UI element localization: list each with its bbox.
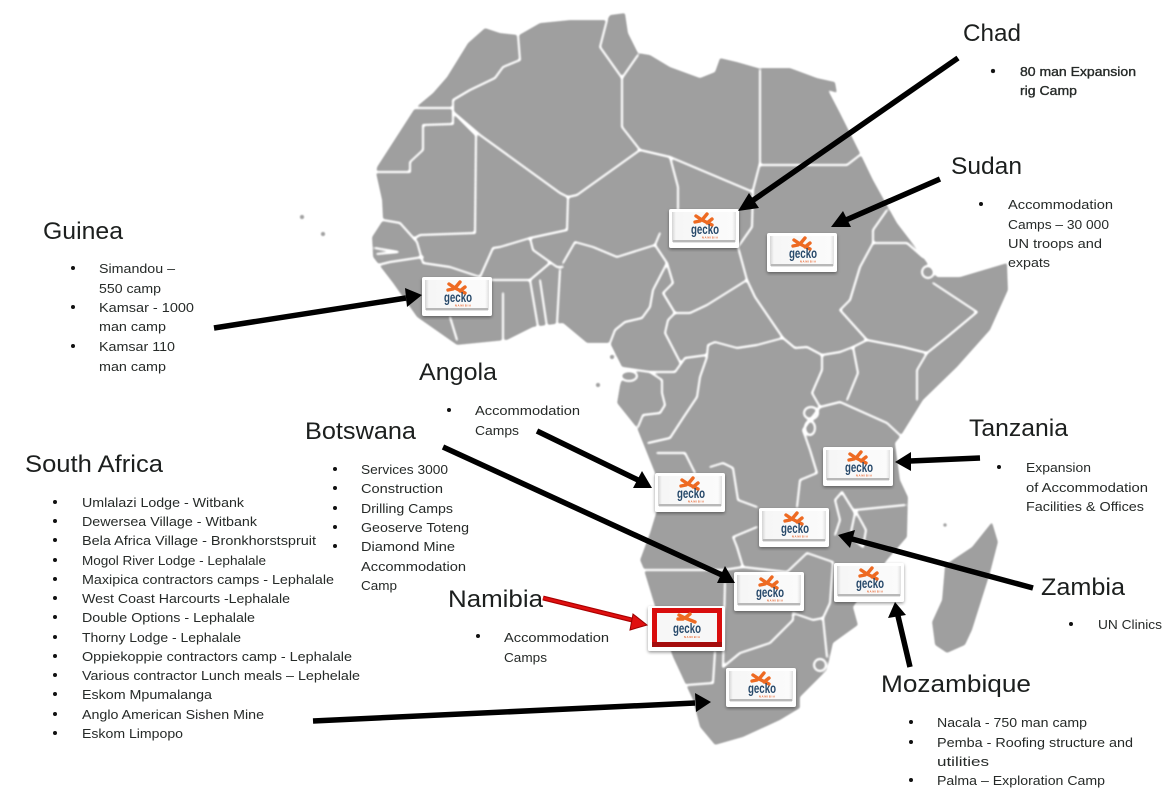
list: Guinea: Simandou – xyxy=(99,261,176,276)
label: Tanzania xyxy=(969,415,1148,514)
heading: Mozambique: Mozambique xyxy=(881,671,1031,698)
logo card: Chad xyxy=(669,209,739,248)
list: Sudan: expats xyxy=(1008,255,1050,270)
list: Zambia: UN Clinics xyxy=(1098,617,1162,632)
logo card: Namibia highlighted: gecko xyxy=(673,620,701,636)
arrow: Botswana xyxy=(443,447,735,583)
heading: Sudan: Sudan xyxy=(951,153,1022,180)
logo card: Angola: NAMIBIA xyxy=(688,500,704,504)
list: Botswana: Drilling Camps xyxy=(361,501,453,516)
logo card: Guinea: gecko xyxy=(444,289,472,305)
list: Mozambique xyxy=(909,715,1133,788)
list: South Africa xyxy=(53,495,360,741)
list: South Africa: Dewersea Village - Witbank xyxy=(82,514,257,529)
list: Botswana: Geoserve Toteng xyxy=(361,520,469,535)
list: Tanzania: Facilities & Offices xyxy=(1026,499,1144,514)
heading: Chad: Chad xyxy=(963,20,1021,47)
arrow: Mozambique xyxy=(888,602,910,667)
label: Zambia xyxy=(1041,574,1162,632)
list: South Africa: Various contractor Lunch meals – Lephelale xyxy=(82,668,360,683)
logo card: Zambia: gecko xyxy=(781,520,809,536)
logo card: Angola: gecko xyxy=(677,485,705,501)
list: Sudan xyxy=(979,197,1113,270)
country borders xyxy=(375,20,977,685)
logo card: Guinea xyxy=(422,277,492,316)
logo card: Sudan: NAMIBIA xyxy=(800,260,816,264)
Madagascar xyxy=(932,522,998,653)
list: Mozambique: Nacala - 750 man camp xyxy=(937,715,1087,730)
arrow: Chad xyxy=(738,58,958,211)
logo card: Zambia xyxy=(759,508,829,547)
list: South Africa: Oppiekoppie contractors camp - Lephalale xyxy=(82,649,352,664)
label: Mozambique xyxy=(881,671,1133,788)
logo card: Mozambique xyxy=(834,563,904,602)
logo card: Tanzania: NAMIBIA xyxy=(856,474,872,478)
label: Namibia xyxy=(448,586,609,665)
list: Botswana: Accommodation xyxy=(361,559,466,574)
arrow: South Africa xyxy=(313,693,711,721)
heading: Guinea: Guinea xyxy=(43,218,123,245)
list: Guinea: Kamsar 110 xyxy=(99,339,175,354)
logo card: Namibia highlighted xyxy=(648,606,725,651)
list: Sudan: Accommodation xyxy=(1008,197,1113,212)
arrow: Angola xyxy=(537,431,652,488)
list: Mozambique: utilities xyxy=(937,754,990,769)
logo card: Sudan xyxy=(767,233,837,272)
list: Guinea: Kamsar - 1000 xyxy=(99,300,194,315)
list: Botswana: Services 3000 xyxy=(361,462,448,477)
list: Chad xyxy=(991,64,1136,98)
list: Chad: 80 man Expansion xyxy=(1020,64,1136,79)
label: Sudan xyxy=(951,153,1113,270)
list: Botswana: Construction xyxy=(361,481,443,496)
list: South Africa: Maxipica contractors camps - Lephalale xyxy=(82,572,334,587)
label: South Africa xyxy=(25,451,360,741)
label: Angola xyxy=(419,359,580,438)
arrow: Zambia xyxy=(838,530,1033,588)
map of Africa xyxy=(280,0,1020,760)
logo card: Tanzania: gecko xyxy=(845,459,873,475)
list: Namibia xyxy=(476,630,609,665)
list: South Africa: West Coast Harcourts -Lephalale xyxy=(82,591,290,606)
list: Chad: rig Camp xyxy=(1020,83,1077,98)
logo card: Chad: gecko xyxy=(691,221,719,237)
list: Namibia: Camps xyxy=(504,650,547,665)
list: South Africa: Bela Africa Village - Bronkhorstspruit xyxy=(82,533,316,548)
heading: Angola: Angola xyxy=(419,359,497,386)
list: South Africa: Mogol River Lodge - Lephalale xyxy=(82,553,266,568)
list: Mozambique: Palma – Exploration Camp xyxy=(937,773,1105,788)
list: Sudan: Camps – 30 000 xyxy=(1008,217,1109,232)
logo card: Zambia: NAMIBIA xyxy=(792,534,808,538)
list: Guinea: 550 camp xyxy=(99,281,161,296)
list: Guinea: man camp xyxy=(99,359,166,374)
list: Tanzania xyxy=(997,460,1148,514)
label: Chad xyxy=(963,20,1136,98)
arrow: Namibia xyxy=(543,598,647,630)
list: Guinea xyxy=(71,261,194,374)
list: South Africa: Umlalazi Lodge - Witbank xyxy=(82,495,244,510)
heading: Botswana: Botswana xyxy=(305,418,416,445)
continent outline xyxy=(372,13,1008,745)
logo card: Botswana xyxy=(734,572,804,611)
arrow: Sudan xyxy=(831,179,940,227)
heading: Zambia: Zambia xyxy=(1041,574,1125,601)
list: South Africa: Eskom Mpumalanga xyxy=(82,687,213,702)
logo card: Namibia highlighted: NAMIBIA xyxy=(684,635,700,639)
logo card: Sudan: gecko xyxy=(789,245,817,261)
list: Botswana: Diamond Mine xyxy=(361,539,455,554)
list: Namibia: Accommodation xyxy=(504,630,609,645)
list: Angola xyxy=(447,403,580,438)
list: Botswana xyxy=(333,462,469,593)
list: Sudan: UN troops and xyxy=(1008,236,1102,251)
arrow: Tanzania xyxy=(895,452,980,471)
logo card: Angola xyxy=(655,473,725,512)
list: Tanzania: Expansion xyxy=(1026,460,1091,475)
logo card: Chad: NAMIBIA xyxy=(702,236,718,240)
list: Angola: Accommodation xyxy=(475,403,580,418)
logo card: Botswana: NAMIBIA xyxy=(767,598,783,602)
list: Tanzania: of Accommodation xyxy=(1026,480,1148,495)
logo card: South Africa: gecko xyxy=(748,680,776,696)
label: Guinea xyxy=(43,218,194,374)
logo card: Tanzania xyxy=(823,447,893,486)
logo card: South Africa xyxy=(726,668,796,707)
heading: Namibia: Namibia xyxy=(448,586,543,613)
list: Mozambique: Pemba - Roofing structure and xyxy=(937,735,1133,750)
islands xyxy=(300,215,947,527)
heading: South Africa: South Africa xyxy=(25,451,163,478)
logo card: Mozambique: NAMIBIA xyxy=(867,590,883,594)
list: Guinea: man camp xyxy=(99,319,166,334)
heading: Tanzania: Tanzania xyxy=(969,415,1068,442)
logo card: South Africa: NAMIBIA xyxy=(759,694,775,698)
list: South Africa: Eskom Limpopo xyxy=(82,726,183,741)
logo card: Mozambique: gecko xyxy=(856,575,884,591)
list: Angola: Camps xyxy=(475,423,519,438)
list: South Africa: Anglo American Sishen Mine xyxy=(82,707,264,722)
list: South Africa: Double Options - Lephalale xyxy=(82,610,255,625)
list: South Africa: Thorny Lodge - Lephalale xyxy=(82,630,241,645)
label: Botswana xyxy=(305,418,469,593)
logo card: Guinea: NAMIBIA xyxy=(455,304,471,308)
arrow: Guinea xyxy=(214,288,422,328)
list: Botswana: Camp xyxy=(361,578,397,593)
logo card: Botswana: gecko xyxy=(756,584,784,600)
